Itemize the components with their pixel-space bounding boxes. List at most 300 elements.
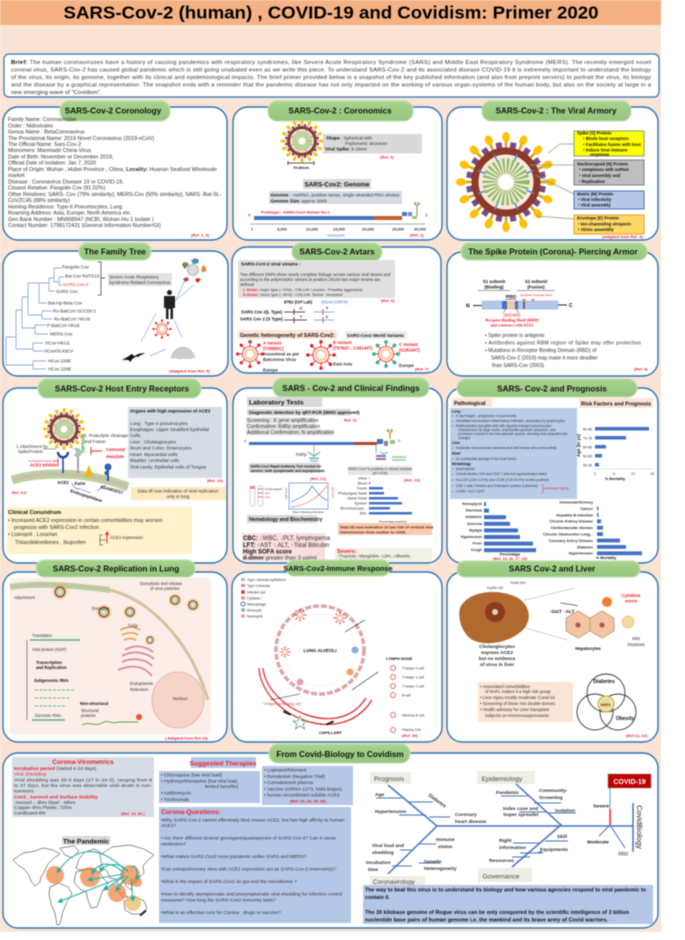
heading: world variants — [345, 331, 407, 339]
text block: pathological findings: Heart — [452, 452, 461, 456]
brief text block: of the virus, its origin, its genome, together with its clinical and epidemiological impacts. The brief primer provided below is a snapshot of the key published information (and also from preprint servers) to portrait the virus, its biology — [11, 75, 651, 81]
heading: Covidism — [269, 744, 410, 763]
genome map: 30,000 — [414, 226, 426, 232]
chart: positivity in clinical samples: Urine — [358, 476, 367, 480]
callout: closing message: The way to beat this virus is to understand its biology and how various agencies respond to viral pandemic to — [365, 888, 647, 894]
callout: nucleocapsid protein: Nucleocapsid (N) Protein — [577, 162, 628, 166]
chart: symptoms percentage: Anorexia — [467, 522, 482, 526]
variant A: Europe — [263, 368, 278, 372]
reference note: (Ref. 1, 2) — [191, 232, 210, 238]
reference note: (Adapted from Ref. 5) — [169, 368, 210, 374]
chart: antibody kinetics — [250, 483, 335, 514]
genome map: 20,000 — [362, 226, 374, 232]
icon: bat — [122, 353, 145, 362]
title: SARS-Cov-2 (human) , COVID-19 and Covidism: Primer 2020 — [64, 2, 599, 22]
chart: symptoms percentage: Hemoptysis — [462, 502, 482, 506]
corona questions: •Can extrapulmonary sites with ACE2 expression act as SARS-Cov-2 reservoir(s)? — [161, 866, 337, 872]
chart: positivity in clinical samples: Nasal Swab — [347, 496, 367, 500]
callout: corona-virometrics: to 37 days, but the virus was detectable until death in non- — [14, 783, 152, 789]
callout: matrix protein: • Viral infectivity — [578, 197, 612, 202]
icon: red virus — [152, 319, 172, 339]
callout: comorbidities: subjects on immunosuppressants — [485, 713, 549, 718]
text block: pathological findings: prominent nucleoli in the intra-alveolar spaces, showing viral cytopathic-like — [458, 432, 568, 436]
callout: organs with high ACE2: Ileum and Colon: Enterocytes — [130, 446, 192, 450]
bullet list — [485, 333, 641, 369]
chart: comorbidity mortality: Diabetes — [577, 545, 593, 549]
genome description: Genome Size: approx 30Kb — [270, 198, 328, 204]
fishbone labels: status — [438, 844, 453, 850]
chart: comorbidity mortality: Cancer — [580, 507, 594, 511]
panel: From Covid-Biology to Covidism — [3, 744, 658, 928]
cell diagram labels: Reticulum — [130, 687, 149, 692]
text block: virus profile: The Official Name: Sars-Cov-2 — [8, 142, 81, 148]
bullet list: • Antibodies against RBM region of Spike may offer protection — [485, 340, 641, 346]
spike domain diagram: and s interact with ACE2 — [490, 322, 534, 328]
heading: suggested therapies — [190, 757, 257, 768]
callout: blood findings: LFT: ↑AST ↑ ALT, ↑Total Bilirubin — [243, 543, 330, 549]
diagram: genome targets: 5' — [244, 440, 247, 444]
corona questions: •Why SARS-Cov-2 cannot effectively bind mouse ACE2, but has high affinity to human — [161, 818, 345, 824]
chart: symptoms percentage — [461, 502, 536, 556]
text block: virus profile: Misnomers: Manmade China-Virus — [8, 148, 91, 154]
icon: pangolin — [171, 347, 195, 359]
chart: symptoms percentage: Cough — [471, 548, 482, 552]
fish spine and bones — [388, 784, 633, 874]
heading: genetic heterogeneity: Genetic heterogeneity of SARS-Cov2: — [240, 333, 335, 339]
label: mild steatosis: Steatosis — [627, 642, 645, 647]
heading: suggested therapies: Suggested Therapies — [190, 760, 257, 768]
legend: lymph node: T helper 1 cell — [402, 676, 424, 680]
phylogenetic tree: Bat-Hp-Beta Cov — [48, 300, 83, 306]
legend: lung cell types: Type I Alveolar epithelium — [247, 578, 286, 582]
text block: pathological findings: • X-ray images : progression of pneumonia — [452, 414, 516, 418]
heading: Replication: SARS-Cov-2 Replication in Lung — [53, 564, 179, 574]
cell diagram labels: Non-structural — [80, 701, 108, 706]
heading: Avtars: SARS-Cov-2 Avtars — [299, 248, 375, 256]
panel: Liver — [447, 561, 658, 742]
corona questions — [159, 807, 351, 923]
text block: pathological findings — [450, 408, 577, 499]
variant B: East Asia — [333, 362, 353, 366]
genome map: 5' — [248, 212, 251, 218]
genome map: basepairs — [327, 232, 345, 238]
text block: virus profile: The Provisional Name: 2019 Novel Coronavirus (2019-nCoV) — [8, 136, 154, 142]
callout: envelope protein: • Virion assembly — [578, 227, 614, 232]
heading: Coronology — [60, 101, 170, 121]
connector lines — [530, 144, 574, 219]
cell diagram labels: proteins — [81, 713, 96, 718]
cell diagram — [10, 578, 211, 735]
variant B: B Variant — [333, 340, 352, 345]
bullet list: than SARS-Cov (2003) — [492, 363, 544, 369]
reference note: (Ref. 8) — [634, 366, 648, 372]
text block: pathological findings: • No substantial damage in the heart tissue — [452, 457, 517, 461]
genome map — [248, 201, 428, 238]
callout: COVID-19: COVID-19 — [613, 779, 646, 786]
legend: lymph node: T helper 0 cell — [402, 666, 424, 670]
spike domain diagram — [466, 279, 573, 328]
genome map: 3' — [425, 212, 428, 218]
labels: host entry steps: ACE2 Inhibitor — [30, 462, 59, 468]
fishbone labels: Pandemic — [496, 790, 519, 796]
corona questions: •How to identify asymptomatic and presymptomatic viral shedding for infection control — [161, 892, 342, 898]
severity labels: Severe — [593, 804, 609, 810]
chart: positivity in clinical samples: (Ref. 13) — [404, 478, 420, 482]
text block: viral strains: Two different SNPs show nearly complete linkage across various viral strains and — [240, 272, 391, 277]
world map — [13, 845, 154, 925]
variant A: Batcorona Virus — [263, 357, 297, 362]
heading: Immune Response — [283, 560, 393, 576]
callout: envelope protein: Envelope (E) Protein — [577, 216, 619, 220]
cell diagram labels: Golgi — [128, 623, 138, 628]
callout: clinical conundrum: prognosis with SARS-Cov2 infection — [14, 525, 99, 531]
fishbone labels: time — [368, 867, 378, 873]
chart: positivity in clinical samples: Feces — [357, 486, 367, 490]
heading: Covidism: From Covid-Biology to Covidism — [276, 750, 404, 759]
laboratory tests: Laboratory Tests — [249, 400, 304, 406]
heading: world variants: SARS-Cov2 World Variants — [347, 333, 405, 338]
text block: viral strains: according to the polymorphic variant at position 28144 two major strains are — [240, 277, 381, 282]
label: CovidBiology: CovidBiology — [635, 805, 644, 849]
panel: Family Tree — [3, 243, 228, 376]
callout: replication data: Data till now indicative of viral replication — [138, 488, 219, 494]
corona questions: •What is the impact of SARS-Cov2 on gut and the microbiome ? — [161, 879, 297, 885]
chart: age vs mortality: 0 — [594, 472, 596, 476]
brief text block: Brief: The human coronaviruses have a history of causing pandemics with respiratory syndromes, like Severe Acute Respiratory Syndrome (SARS) and Middle East Respiratory Syndrome (MERS). The recently emerged novel — [11, 60, 651, 66]
label: mild steatosis — [622, 616, 645, 647]
corona questions: •What makes SARS-Cov2 more pandemic unlike SARS and MERS? — [161, 854, 307, 860]
legend: lung cell types: Type II Alveolar — [247, 584, 271, 588]
chart: antibody kinetics: IgG — [265, 491, 270, 495]
callout: closing message: nucleotide base pairs of human genome i.e. the mankind and its brave army of Covid warriors. — [365, 918, 609, 924]
callout: matrix protein — [574, 191, 644, 209]
panel: Immune Response — [232, 560, 442, 742]
text block: pathological findings: • CCR6+ Th17 CD4T — [452, 490, 485, 494]
variant B: (T8782C , C28144T) — [333, 346, 373, 350]
brief text block — [4, 54, 659, 97]
text block: cholangiocytes: Cholangiocytes — [479, 644, 515, 650]
chart: antibody kinetics: IgM — [265, 495, 270, 499]
category: governance: Governance — [482, 874, 520, 880]
chart: comorbidity mortality: Hepatitis B infection — [556, 513, 594, 517]
callout: related coronavirus group: Syndrome Related Coronavirus — [109, 280, 171, 285]
category: governance — [478, 868, 532, 882]
chart: age vs mortality: 60-65 — [583, 446, 592, 450]
genome map: (Ref. 1) — [410, 232, 424, 238]
heading: Avtars — [292, 243, 382, 261]
callout: severe markers: Severe: — [337, 549, 357, 555]
callout: rapid antibody test: SARS-Cov2 Rapid Antibody Test needed for — [250, 464, 322, 468]
callout: organs with high ACE2: Oral cavity: Epithelial cells of Tongue — [130, 464, 207, 470]
text block: virus profile: market — [8, 173, 25, 179]
text block: virus profile: Homing Residence: Type-II Pneumocytes, Lung — [8, 204, 122, 210]
callout: organs with high ACE2: Bladder: Urothelial cells — [130, 458, 180, 463]
labels: host entry steps: 2. Proteolytic cleavage — [84, 433, 129, 438]
text block: pathological findings: • lymphopenia — [452, 467, 475, 471]
genome map: 10,000 — [306, 226, 318, 232]
callout: clinical conundrum: • Increased ACE2 expression in certain comorbidities may worsen — [8, 518, 162, 524]
labels: host entry steps: Ref. 9,9 — [12, 490, 27, 495]
heading: Prognosis — [457, 379, 637, 397]
chart: positivity in clinical samples: Percentage positivity — [379, 520, 407, 524]
genome map: 5,000 — [277, 226, 287, 232]
legend: lung cell types: Neutrophil — [247, 614, 263, 618]
legend: lymph node: Plasma Cell — [402, 728, 421, 732]
bullet list: • Spike protein is antigenic — [485, 333, 545, 339]
labels: host entry steps: Endoxpeptidase — [70, 488, 103, 503]
callout: corona-virometrics: Cardboard-8hr — [14, 810, 46, 816]
panel: SARS-Cov-2 Coronology — [3, 101, 227, 240]
legend: lung cell types: Monocyte — [247, 608, 262, 612]
bullet list: • Mutations in Receptor Binding Domain (RBD) of — [485, 348, 597, 354]
diagram: liver and bile duct — [459, 581, 575, 643]
chart: symptoms percentage: Hypotension — [461, 535, 482, 539]
chart: comorbidity mortality: Coronary Artery Disease — [549, 539, 593, 543]
panel: Host Entry Receptors — [3, 379, 227, 563]
callout: corona-virometrics: Aerosol – 3hrs Steel : 48hrs — [15, 800, 76, 806]
callout: clinical conundrum: Clinical Conundrum — [8, 510, 61, 516]
phylogenetic tree: Ro-BatCoV HKU9 — [54, 316, 91, 322]
chart: symptoms percentage: Fever — [473, 542, 483, 546]
callout: clinical conundrum: Thiazolidinediones , Ibuprofen — [15, 540, 86, 546]
corona questions: Corona-Questions: — [161, 809, 221, 816]
icon: cytokine storm: storm — [625, 598, 637, 604]
callout: organs with high ACE2: Cells — [130, 433, 141, 438]
callout: nucleocapsid protein: • viral assembly and — [579, 173, 621, 178]
category: epidemiology: Epidemiology — [482, 776, 523, 783]
phylogenetic tree: HCov 229B — [48, 366, 71, 372]
callout: spike protein: • Binds host receptors — [583, 136, 629, 141]
panel: Coronomics — [233, 101, 442, 240]
panel: Clinical Findings — [233, 378, 442, 563]
callout: related coronavirus group — [108, 273, 172, 286]
labels: host entry steps — [12, 433, 129, 503]
phylogenetic tree: Ro-BatCoV GCCDC1 — [53, 308, 97, 314]
fishbone labels: Immune — [436, 837, 455, 843]
heading: genome — [303, 179, 371, 189]
genome map: 1 — [251, 226, 254, 232]
laboratory tests — [246, 397, 360, 436]
text block: virus profile: Gen Bank Number : MN908947 (NCBI, Wuhan-Hu-1 Isolate ) — [8, 217, 154, 223]
spike domain diagram: (polybasic cleavage sites) — [520, 293, 552, 297]
therapy list 1: • Hydroxychloroquine (low viral load, — [161, 778, 238, 784]
labels: host entry steps: Camostat — [106, 447, 126, 452]
phylogenetic tree: HCov-HKU1 — [45, 340, 70, 346]
diagram: alveoli and capillary: * Antigen presenting cell — [262, 702, 301, 706]
venn diagram — [577, 674, 636, 730]
chart: comorbidity mortality: Chronic Obstructive Lung... — [543, 532, 593, 536]
shape and spike callout: Viral Spike: 9-15nm — [325, 146, 367, 152]
panel: Viral Armory — [447, 101, 658, 240]
labels: host entry steps: and Fusion — [84, 439, 106, 444]
heading: pathological — [452, 398, 492, 407]
callout: blood findings: d-dimer greater than 3 μg/ml — [243, 556, 316, 562]
fishbone diagram — [366, 771, 651, 886]
text block: virus profile: Official Date of Isolation: Jan 7, 2020 — [8, 161, 96, 167]
cell diagram labels: Transcription — [36, 660, 62, 665]
heading: Liver — [457, 561, 640, 577]
laboratory tests: Ref. 11 — [344, 418, 358, 422]
callout: spike protein: • Induce host immune — [583, 148, 628, 152]
text block: pathological findings: • Interstitial mononuclear inflammatory infiltrates, dominated by lymphocytes, — [452, 419, 566, 423]
genome map: Prototype : SARS-Cov2 Wuhan Hu-1 — [261, 210, 331, 214]
heading: Replication — [36, 560, 195, 577]
diagram: liver and bile duct: Portal Vein — [510, 581, 526, 585]
labels: host entry steps: mesylate — [106, 454, 125, 459]
chart: age vs mortality: 5 — [613, 472, 615, 476]
fishbone labels: shedding — [372, 850, 394, 856]
callout: organs with high ACE2: Liver : Cholangiocytes — [130, 440, 177, 444]
phylogenetic tree: HCov 229E — [48, 358, 71, 364]
reference note: (Ref. 12) — [310, 476, 326, 481]
severity labels — [587, 804, 609, 846]
heading: Clinical Findings: SARS - Cov-2 and Clinical Findings — [282, 384, 420, 393]
callout: rapid antibody test: carriers: both symptomatic and asymptomatic — [250, 469, 325, 473]
text block: pathological findings: immune injury — [545, 486, 569, 490]
category: prognosis — [370, 772, 411, 784]
callout: closing message: The 30 kilobase genome of Rogue virus can be only conquered by the scientific intelligence of 3 billion — [365, 910, 629, 916]
callout: severe markers — [335, 548, 432, 563]
callout: rapid antibody test — [249, 463, 325, 473]
text block: viral strains: L Strain: major type (~70%) : T28,144: Leucine : Possibly aggressive — [243, 287, 363, 292]
shape and spike callout: Shape : Spherical with — [326, 136, 373, 140]
heading: Prognosis: SARS- Cov-2 and Prognosis — [497, 384, 607, 394]
callout: blood findings: High SOFA score — [243, 550, 292, 556]
callout: matrix protein: • Viral assembly — [578, 202, 611, 208]
venn diagram: Obesity — [616, 716, 634, 722]
SNP alignment diagram: (Ref. 6) — [381, 298, 395, 303]
arrows: transmission — [141, 280, 194, 356]
cell diagram labels: and Replication — [36, 665, 67, 670]
scale bar 70-80nm: 70-80nm — [293, 165, 310, 170]
text block: viral strains — [238, 260, 395, 298]
variant B — [306, 340, 373, 370]
chart: age vs mortality: 35-45 — [583, 464, 592, 468]
variant C: (G28144T) — [399, 348, 420, 352]
genome description — [269, 191, 402, 204]
chart: comorbidity mortality: % Mortality — [596, 556, 617, 560]
icon: virion — [43, 408, 85, 450]
SNP alignment diagram: T — [326, 306, 329, 310]
callout: vertical transmission: transmission from mother to child. — [340, 530, 406, 534]
callout: blood findings: CBC: ↓WBC, ↓PLT, lymphopenia — [243, 536, 331, 542]
callout: corona-virometrics: Cov2 , Aerosol and Surface Stability — [14, 794, 98, 800]
phylogenetic tree: SARS Cov-2 — [63, 282, 89, 287]
heading: pathological: Pathological — [454, 401, 486, 407]
heading: Coronomics: SARS-Cov-2 : Coronomics — [288, 106, 392, 116]
therapy list 1: • Tocilizumab — [161, 797, 189, 803]
corona questions: •What is an effective cure for Corona : drugs or vaccine? — [161, 910, 281, 916]
category: coronavirology — [370, 876, 425, 886]
callout: nucleocapsid protein: • Replication — [579, 179, 605, 184]
cell diagram labels: of virus particles — [150, 586, 180, 591]
fishbone labels: Super spreader — [503, 812, 539, 818]
legend: lymph node: T helper 2 cell — [402, 684, 424, 688]
diagram: alveoli and capillary: CAPILLARY — [319, 730, 342, 735]
text block: cholangiocytes: express ACE2 — [481, 650, 513, 656]
fishbone labels: Skill — [557, 834, 568, 840]
therapy list 2: • human recombinant soluble ACE2 — [264, 792, 340, 798]
fishbone labels: Heterogeneity — [424, 866, 457, 872]
text block: pathological findings: Lung : — [452, 410, 462, 414]
phylogenetic tree: Bat Cov RaTG13 — [65, 274, 100, 278]
callout: comorbidities: of NAFL makes it a high risk group — [485, 689, 551, 694]
callout: clinical conundrum: ACE2 expression — [110, 535, 144, 540]
callout: clinical conundrum: • Lisinopril , Losartan — [8, 532, 57, 538]
therapy list 2: • Convalescent plasma — [264, 780, 313, 786]
diagram: hepatocytes — [549, 603, 614, 651]
callout: replication data — [131, 487, 226, 500]
SNP alignment diagram: 28144 (ORF8) — [321, 300, 348, 304]
chart: positivity in clinical samples: SARS Cov2 % positivity in clinical samples — [348, 467, 412, 471]
heading: The Pandemic: The Pandemic — [63, 838, 109, 846]
legend: lymph node — [386, 656, 424, 732]
shape and spike callout: Peplomeric structure — [345, 141, 388, 146]
therapy list 1: limited benefits) — [205, 784, 239, 790]
chart: positivity in clinical samples: Bronchoscope... — [340, 506, 367, 510]
text block: virus profile: CoVZC45 (88% similarity) — [8, 198, 70, 204]
SNP alignment diagram: 8782 (Orf Lab) — [284, 300, 313, 304]
text block: virus profile: Roaming Address: Asia, Europe, North America etc. — [8, 211, 131, 217]
text block: virus profile: Other Relatives: SARS- Cov (79% similarity), MERS-Cov (50% similarity), SARS -Bat-SL- — [8, 192, 222, 198]
callout: spike protein: • Facilitates fusion with host — [583, 142, 641, 147]
callout: corona-virometrics: Incubation period (Varied 4-24 days) — [14, 766, 97, 772]
heading: Host Entry Receptors: SARS-Cov-2 Host Entry Receptors — [55, 384, 190, 394]
spike domain diagram: RBD — [506, 294, 517, 300]
corona questions: measures? How long the SARS-Cov2 immunity lasts? — [161, 898, 276, 904]
fishbone labels: Right — [499, 838, 512, 844]
variant C: (Ref. 7) — [415, 366, 429, 372]
chart: age vs mortality: % Mortality — [605, 477, 626, 481]
chart: positivity in clinical samples — [338, 466, 420, 524]
therapy list 1 — [159, 771, 260, 803]
cell diagram labels: Translation — [32, 633, 53, 638]
heading: risk factors: Risk Factors and Prognosis — [581, 402, 651, 408]
callout: corona-virometrics: Corona-Virometrics — [52, 759, 114, 766]
category: coronavirology: Coronavirology — [373, 879, 416, 886]
chart: symptoms percentage: Myalgia — [469, 528, 482, 532]
cell diagram labels: Attachment — [14, 595, 36, 600]
text block: virus profile: Date of Birth :November or December 2019, — [8, 154, 114, 160]
SNP alignment diagram: C — [300, 306, 303, 310]
fishbone labels: Diabetes — [427, 793, 447, 809]
variant A: A Variant — [263, 340, 282, 346]
cell membrane with receptors: TMPRSS2 — [80, 433, 86, 454]
heading: Spike Protein: The Spike Protein (Corona)- Piercing Armor — [468, 248, 639, 256]
diagram: liver and bile duct: Kupffer cell — [487, 586, 503, 590]
fishbone labels: heart disease — [455, 819, 487, 825]
SNP alignment diagram: SARS Cov 2(L Type) — [241, 310, 283, 314]
heading: Viral Armory: SARS-Cov-2 : The Viral Armory — [495, 106, 617, 116]
chart: antibody kinetics: Nucleocapsid — [265, 487, 282, 491]
text block: virus profile: Family Name: Coronaviridae — [8, 117, 76, 123]
venn diagram: NAFL — [601, 702, 612, 707]
icon: virion — [280, 120, 324, 162]
icon: receptor cluster — [182, 258, 206, 283]
heading: Coronology: SARS-Cov-2 Coronology — [65, 106, 162, 116]
fishbone labels: Age — [375, 792, 385, 798]
callout: spike protein — [574, 130, 644, 157]
variant C — [372, 340, 429, 372]
fishbone labels — [366, 788, 575, 873]
callout: matrix protein: Matrix (M) Protein — [577, 192, 614, 196]
chart: antibody kinetics: Days following infection — [292, 510, 324, 514]
laboratory tests: Diagnostic detection by qRT-PCR (WHO approved) — [249, 410, 360, 415]
heading: Family Tree — [79, 243, 151, 260]
SNP alignment diagram: C — [326, 314, 329, 319]
chart: age vs mortality: 10 — [631, 472, 635, 476]
diagram: alveoli and capillary — [259, 606, 378, 735]
